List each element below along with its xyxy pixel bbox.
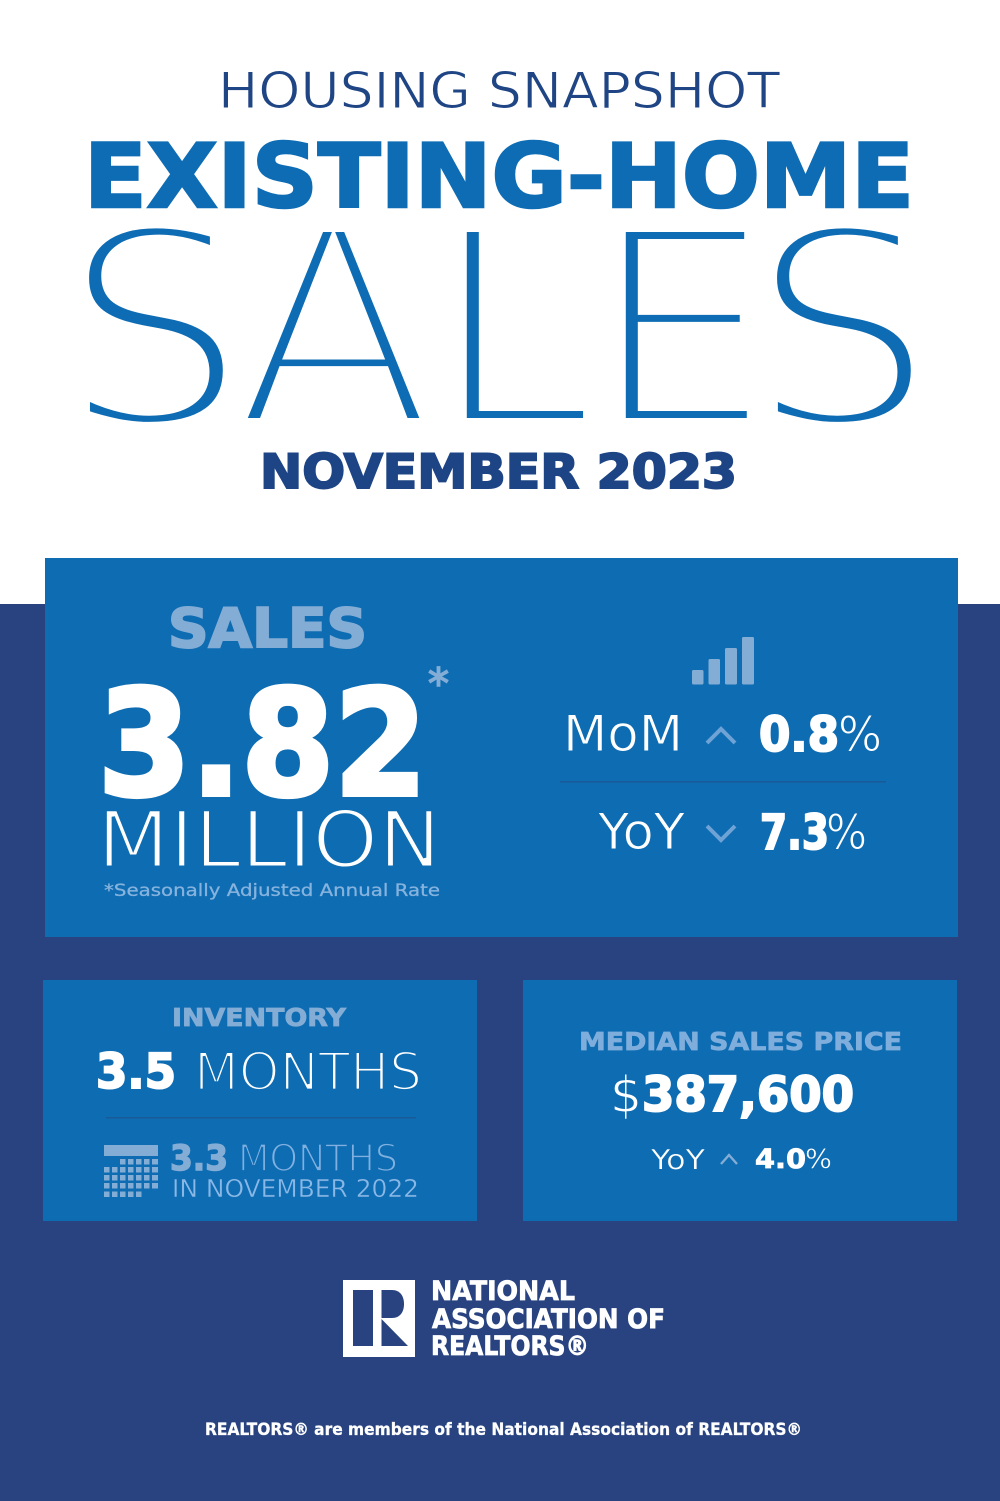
price year over year: 4.0: [755, 1144, 806, 1175]
icon: rising bars: [692, 637, 754, 684]
price year over year: YoY: [650, 1143, 706, 1176]
sales figure: 3.82: [98, 660, 427, 830]
inventory figure: MONTHS: [194, 1042, 422, 1103]
logo wordmark: NATIONAL: [431, 1276, 575, 1307]
panel: inventory: [43, 980, 477, 1221]
heading: sales: SALES: [61, 170, 936, 492]
heading: existing-home: EXISTING-HOME: [84, 125, 914, 228]
logo wordmark: [431, 1276, 665, 1362]
sales label: SALES: [168, 597, 367, 660]
prior year inventory: MONTHS: [238, 1137, 398, 1180]
logo wordmark: REALTORS®: [431, 1331, 589, 1362]
prior year inventory: 3.3: [170, 1139, 228, 1179]
heading: housing snapshot: HOUSING SNAPSHOT: [218, 62, 780, 120]
month over month: [563, 705, 882, 763]
logo wordmark: ASSOCIATION OF: [432, 1304, 665, 1335]
year over year: %: [826, 805, 867, 861]
icon: R mark: [343, 1280, 415, 1357]
asterisk: *: [428, 659, 449, 708]
panel: median sales price: [523, 980, 957, 1221]
logo: national association of realtors: [343, 1276, 665, 1362]
price label: MEDIAN SALES PRICE: [579, 1027, 902, 1056]
footer note: REALTORS® are members of the National Association of REALTORS®: [205, 1420, 802, 1439]
price year over year: [650, 1143, 832, 1176]
price figure: 387,600: [642, 1067, 854, 1123]
prior year inventory: [170, 1137, 419, 1203]
year over year: YoY: [597, 803, 685, 861]
prior year inventory: IN NOVEMBER 2022: [172, 1174, 419, 1203]
inventory label: INVENTORY: [172, 1003, 347, 1032]
panel: sales: [45, 558, 958, 937]
inventory figure: 3.5: [96, 1044, 176, 1100]
year over year: 7.3: [760, 805, 829, 861]
year over year: [597, 803, 867, 861]
price year over year: %: [805, 1144, 832, 1175]
month over month: %: [838, 707, 882, 763]
inventory figure: [96, 1042, 422, 1103]
price figure: $: [610, 1066, 642, 1124]
month over month: 0.8: [759, 707, 839, 763]
footnote: *Seasonally Adjusted Annual Rate: [104, 881, 440, 901]
month over month: MoM: [563, 705, 683, 763]
million label: MILLION: [97, 796, 441, 886]
heading: date: NOVEMBER 2023: [260, 445, 737, 500]
icon: calendar: [104, 1145, 158, 1197]
